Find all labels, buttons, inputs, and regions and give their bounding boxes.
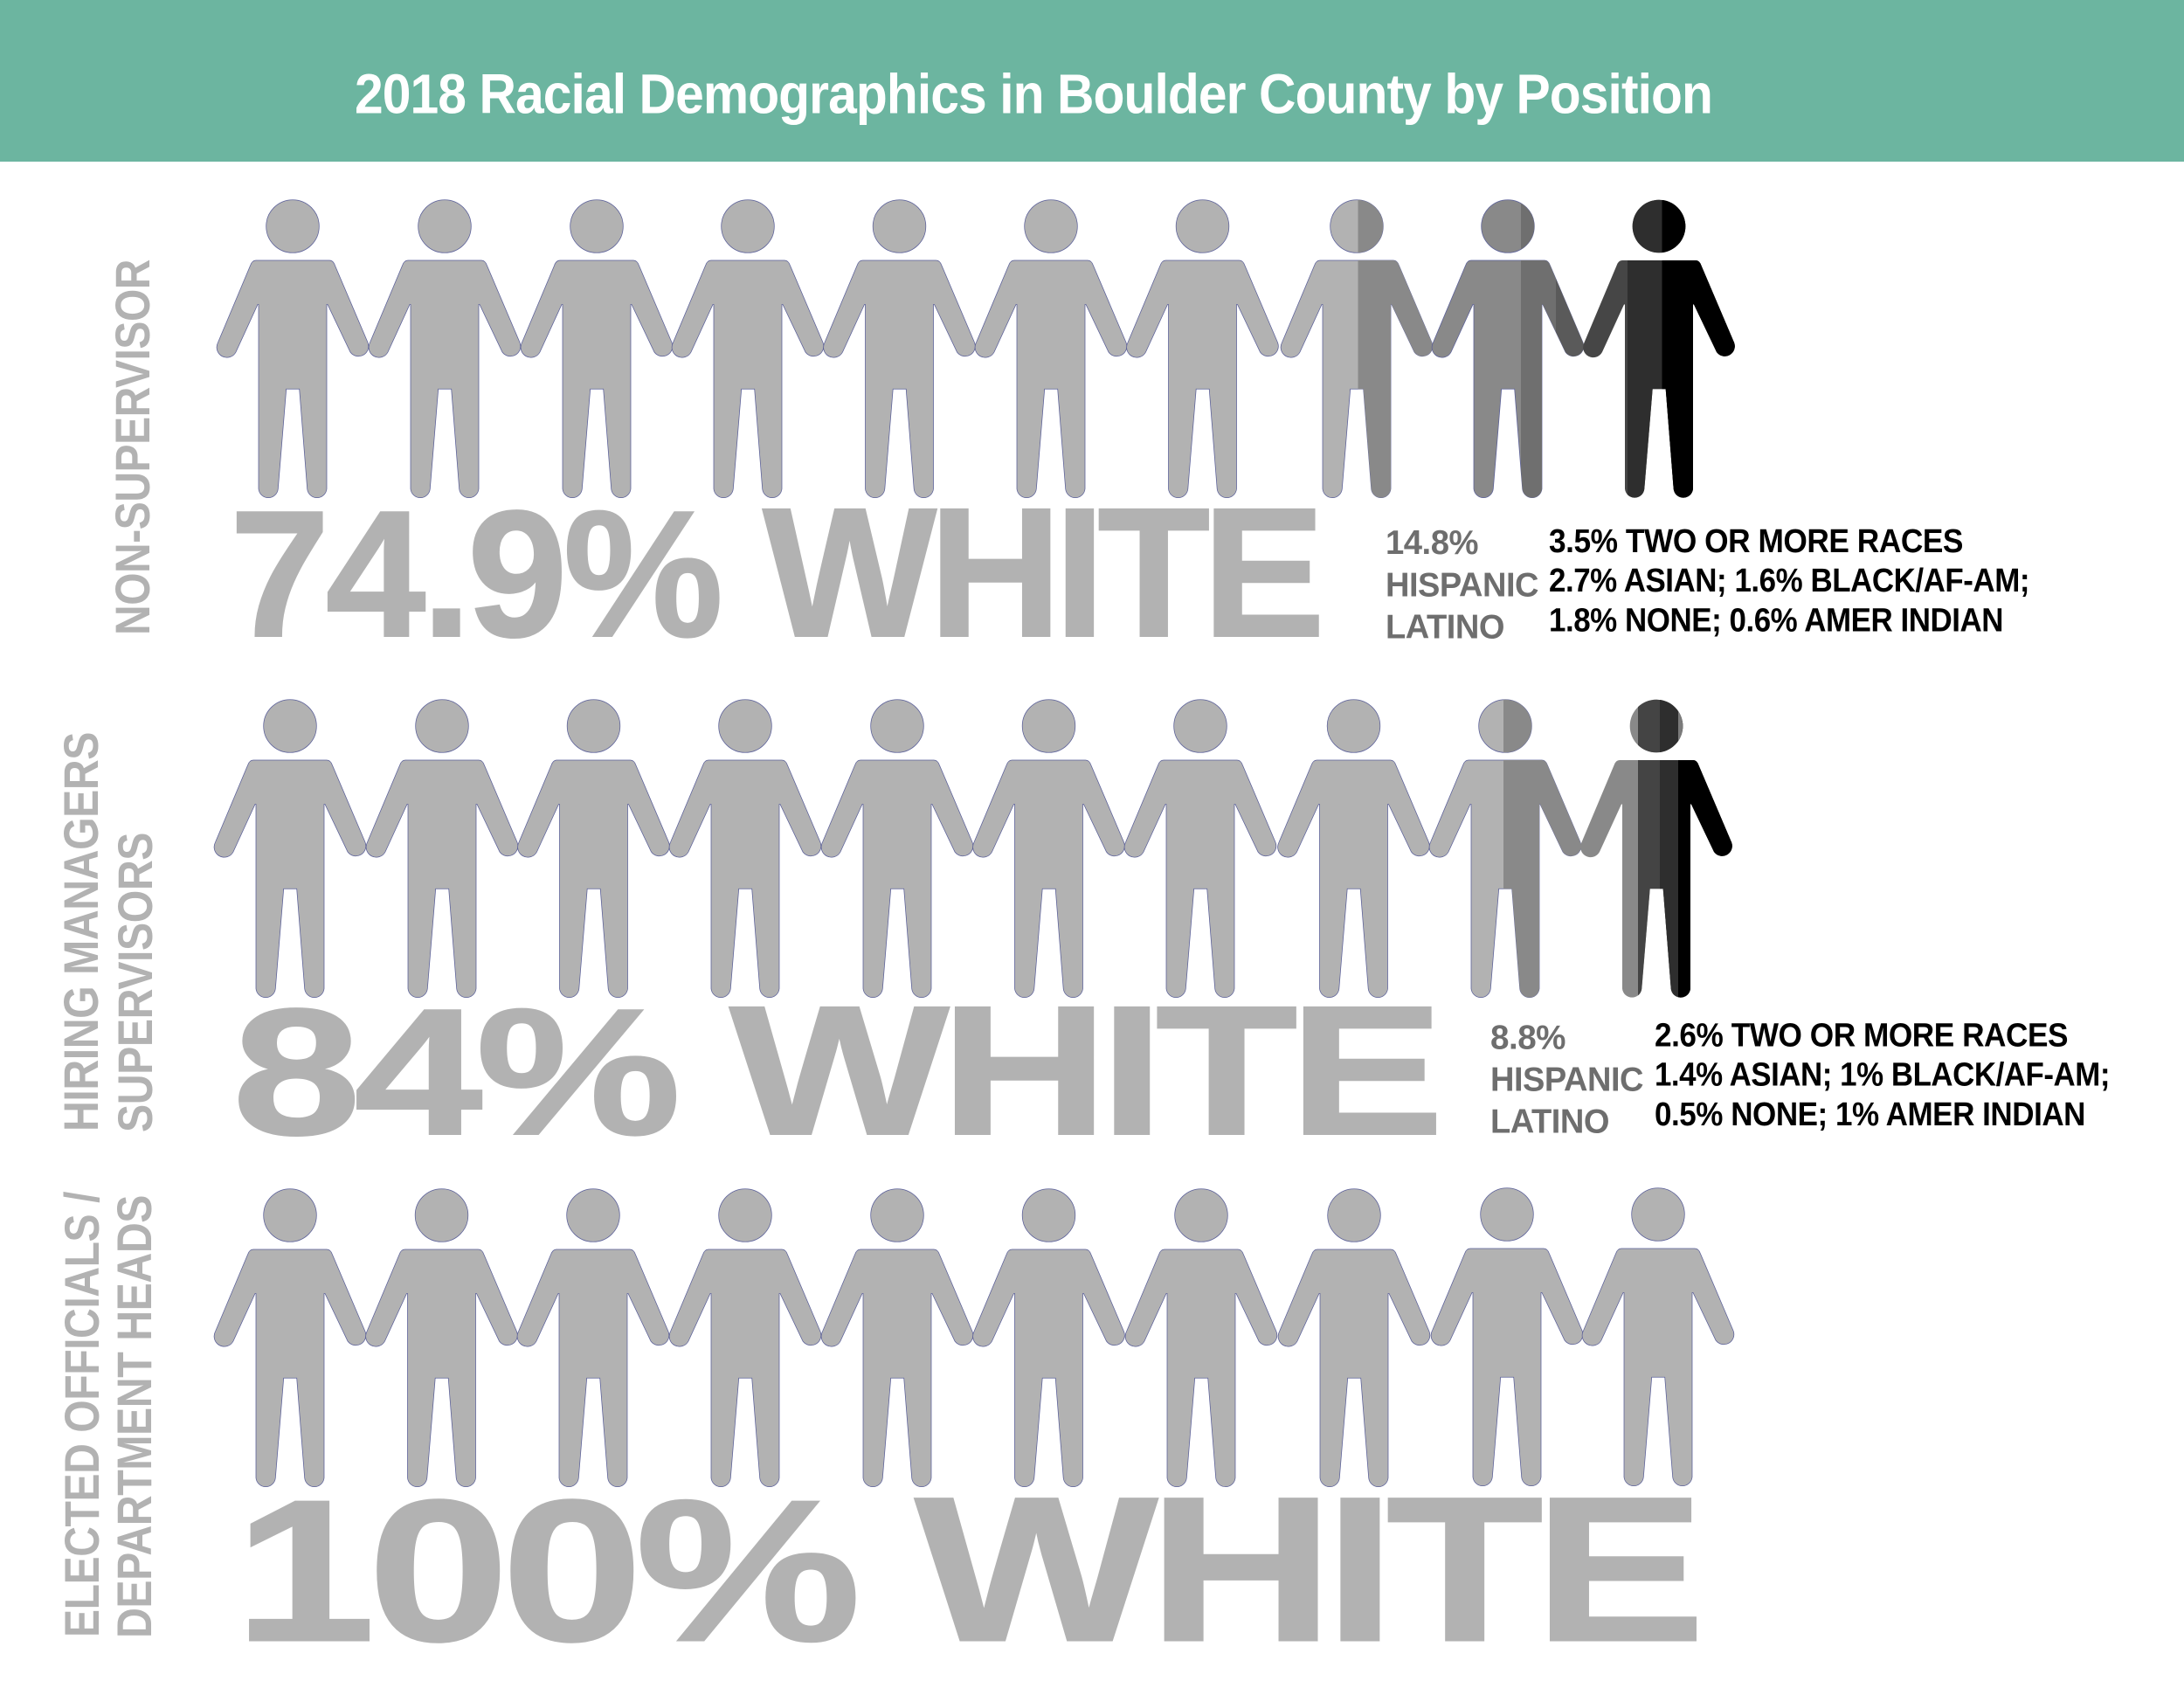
callout: other groups bbox=[1655, 1017, 2110, 1133]
big figure: 100% white: 100% bbox=[234, 1457, 855, 1683]
panel: elected officials and department heads bbox=[54, 1188, 1734, 1685]
pictogram row: non-supervisor bbox=[217, 200, 1735, 498]
big figure: 74.9% white: 74.9% bbox=[230, 474, 723, 675]
icon: person 9 split light and mid gray bbox=[1429, 700, 1581, 998]
icon: person 8 bbox=[1278, 1189, 1430, 1487]
callout: hispanic latino share bbox=[1490, 1020, 1643, 1141]
callout: hispanic latino share bbox=[1386, 524, 1538, 647]
icon: person 1 bbox=[214, 700, 366, 998]
icon: person 9 bbox=[1431, 1188, 1583, 1486]
row label: hiring managers supervisors: SUPERVISORS bbox=[107, 833, 162, 1132]
callout: other groups: 1.4% ASIAN; 1% BLACK/AF-AM; bbox=[1655, 1057, 2110, 1094]
icon: person 10 split shades bbox=[1580, 700, 1732, 998]
title: 2018 Racial Demographics in Boulder County by Position bbox=[355, 63, 1712, 126]
icon: person 2 bbox=[369, 200, 521, 498]
callout: other groups: 3.5% TWO OR MORE RACES bbox=[1549, 523, 1963, 560]
icon: person 5 bbox=[821, 1189, 973, 1487]
icon: person 1 bbox=[214, 1189, 366, 1487]
icon: person 6 bbox=[973, 1189, 1124, 1487]
icon: person 4 bbox=[669, 1189, 821, 1487]
icon: person 4 bbox=[672, 200, 824, 498]
icon: person 9 split gray shades bbox=[1432, 200, 1584, 498]
row label: elected officials department heads: ELECTED OFFICIALS / bbox=[54, 1191, 109, 1637]
big figure: 74.9% white bbox=[230, 469, 1325, 675]
icon: person 8 bbox=[1278, 700, 1429, 998]
icon: person 7 bbox=[1124, 700, 1276, 998]
icon: person 5 bbox=[821, 700, 973, 998]
big figure: 84% white bbox=[232, 967, 1435, 1173]
icon: person 10 split dark shades bbox=[1583, 200, 1735, 498]
icon: person 5 bbox=[824, 200, 975, 498]
callout: other groups: 1.8% NONE; 0.6% AMER INDIAN bbox=[1549, 603, 2003, 640]
row label: hiring managers supervisors bbox=[53, 732, 162, 1132]
panel: non-supervisor bbox=[105, 200, 2029, 675]
big figure: 84% white: WHITE bbox=[729, 967, 1435, 1173]
row label: hiring managers supervisors: HIRING MANAGERS bbox=[53, 732, 108, 1131]
big figure: 100% white: WHITE bbox=[915, 1454, 1697, 1685]
callout: other groups: 0.5% NONE; 1% AMER INDIAN bbox=[1655, 1097, 2085, 1133]
icon: person 1 bbox=[217, 200, 369, 498]
title banner bbox=[0, 0, 2184, 162]
pictogram row: hiring managers supervisors bbox=[214, 700, 1732, 998]
row label: non-supervisor: NON-SUPERVISOR bbox=[105, 259, 160, 635]
icon: person 4 bbox=[669, 700, 821, 998]
icon: person 7 bbox=[1125, 1189, 1277, 1487]
callout: hispanic latino share: LATINO bbox=[1490, 1103, 1609, 1141]
icon: person 10 bbox=[1582, 1188, 1734, 1486]
callout: other groups: 2.7% ASIAN; 1.6% BLACK/AF-AM; bbox=[1549, 563, 2029, 599]
big figure: 74.9% white: WHITE bbox=[763, 469, 1325, 675]
pictogram row: elected officials bbox=[214, 1188, 1734, 1487]
callout: other groups: 2.6% TWO OR MORE RACES bbox=[1655, 1017, 2068, 1054]
icon: person 3 bbox=[518, 700, 669, 998]
icon: person 6 bbox=[975, 200, 1127, 498]
big figure: 84% white: 84% bbox=[232, 972, 675, 1173]
callout: other groups bbox=[1549, 523, 2029, 640]
callout: hispanic latino share: LATINO bbox=[1386, 609, 1504, 647]
row label: elected officials department heads bbox=[54, 1191, 162, 1638]
panel: hiring managers and supervisors bbox=[53, 700, 2110, 1173]
icon: person 7 bbox=[1127, 200, 1278, 498]
icon: person 3 bbox=[521, 200, 673, 498]
callout: hispanic latino share: 14.8% bbox=[1386, 524, 1478, 562]
icon: person 8 split light and mid gray bbox=[1281, 200, 1433, 498]
callout: hispanic latino share: 8.8% bbox=[1490, 1020, 1565, 1057]
callout: hispanic latino share: HISPANIC bbox=[1386, 567, 1538, 605]
big figure: 100% white bbox=[234, 1454, 1697, 1685]
icon: person 3 bbox=[517, 1189, 669, 1487]
icon: person 2 bbox=[366, 700, 518, 998]
icon: person 2 bbox=[366, 1189, 517, 1487]
callout: hispanic latino share: HISPANIC bbox=[1490, 1062, 1643, 1099]
row label: elected officials department heads: DEPARTMENT HEADS bbox=[107, 1195, 162, 1638]
icon: person 6 bbox=[973, 700, 1124, 998]
